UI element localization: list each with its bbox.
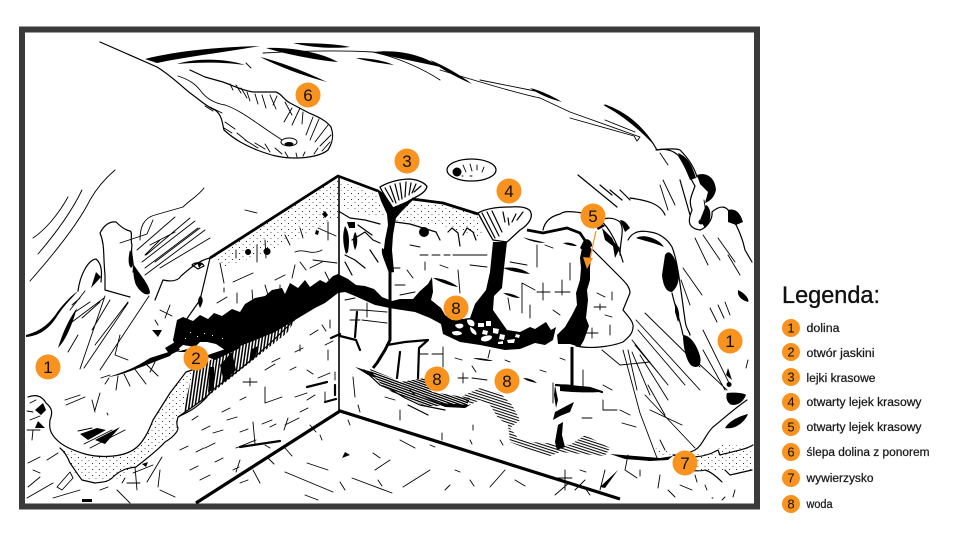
legend item 4: otwarty lejek krasowy: [806, 397, 922, 409]
badge 2: 2: [191, 349, 201, 368]
cave entrance hatching: [178, 303, 310, 417]
solution shafts and cracks: [331, 189, 600, 450]
badge 4: [496, 178, 522, 204]
arrow from badge 5: [583, 231, 596, 269]
legend item 7: [782, 469, 874, 487]
badge 1 right: [718, 328, 742, 354]
badge 8 lower left: [424, 366, 450, 392]
funnel sinkhole 3: [380, 179, 427, 208]
legend item 4: 4: [787, 394, 795, 410]
legend item 5: 5: [787, 420, 795, 434]
legend: [782, 282, 930, 513]
badge 1 left: [36, 354, 60, 380]
legend item 2: otwór jaskini: [806, 348, 874, 360]
badge 5: [580, 204, 606, 228]
legend item 5: [782, 418, 922, 436]
legend item 3: lejki krasowe: [806, 373, 876, 385]
badge 2: [184, 346, 208, 370]
legend item 7: 7: [787, 470, 795, 486]
badge 1 left: 1: [43, 358, 53, 377]
legend item 1: dolina: [806, 323, 840, 335]
legend item 6: ślepa dolina z ponorem: [806, 447, 930, 459]
legend item 3: [782, 368, 876, 386]
badge 6: [296, 82, 320, 108]
badge 8 lower left: 8: [432, 370, 442, 389]
badge 4: 4: [504, 182, 514, 201]
cracks: floor: [253, 435, 697, 500]
legend item 3: 3: [787, 370, 795, 384]
legend item 8: woda: [806, 499, 833, 511]
valley floor and dotted river bed: [27, 369, 207, 503]
legend item 2: [782, 343, 874, 361]
badge 5: 5: [588, 207, 598, 226]
cracks: back wall: [345, 245, 636, 445]
block diagram: karst landscape: [26, 42, 753, 503]
legend item 1: 1: [787, 320, 795, 336]
badge 7: 7: [680, 454, 690, 473]
legend item 6: [782, 443, 930, 461]
blind valley with sinkhole: [100, 42, 333, 158]
badge 1 right: 1: [725, 332, 735, 351]
legend item 5: otwarty lejek krasowy: [806, 422, 922, 434]
open funnel sinkhole 4: [478, 207, 531, 242]
badge 8 upper: 8: [451, 299, 461, 318]
badge 3: [394, 148, 420, 174]
legend item 7: wywierzysko: [805, 473, 874, 485]
left valley hillside: [26, 170, 257, 448]
legend item 2: 2: [787, 344, 795, 360]
badge 8 lower right: 8: [502, 372, 512, 391]
legend item 6: 6: [787, 444, 795, 460]
rock cracks: [180, 211, 697, 500]
cave passage main: [165, 242, 556, 360]
legend item 4: [782, 393, 922, 411]
badge 8 lower right: [494, 368, 520, 394]
cracks: left wall upper: [217, 222, 337, 303]
underground water: [355, 367, 610, 456]
badge 8 upper: [444, 296, 468, 320]
badge 7: [672, 450, 698, 476]
block edges: [155, 176, 633, 503]
legend item 1: [782, 319, 840, 337]
right hillside: [578, 149, 752, 458]
badge 3: 3: [402, 152, 412, 171]
badge 6: 6: [303, 86, 313, 105]
spring river bed: [610, 445, 753, 500]
legend title: Legenda:: [782, 282, 880, 309]
diagram frame: [22, 30, 757, 506]
cracks: left wall lower: [180, 320, 335, 483]
top hillside streaks: [145, 43, 697, 177]
legend item 8: 8: [787, 496, 795, 512]
small sinkhole: [447, 159, 496, 181]
legend item 8: [782, 495, 833, 513]
